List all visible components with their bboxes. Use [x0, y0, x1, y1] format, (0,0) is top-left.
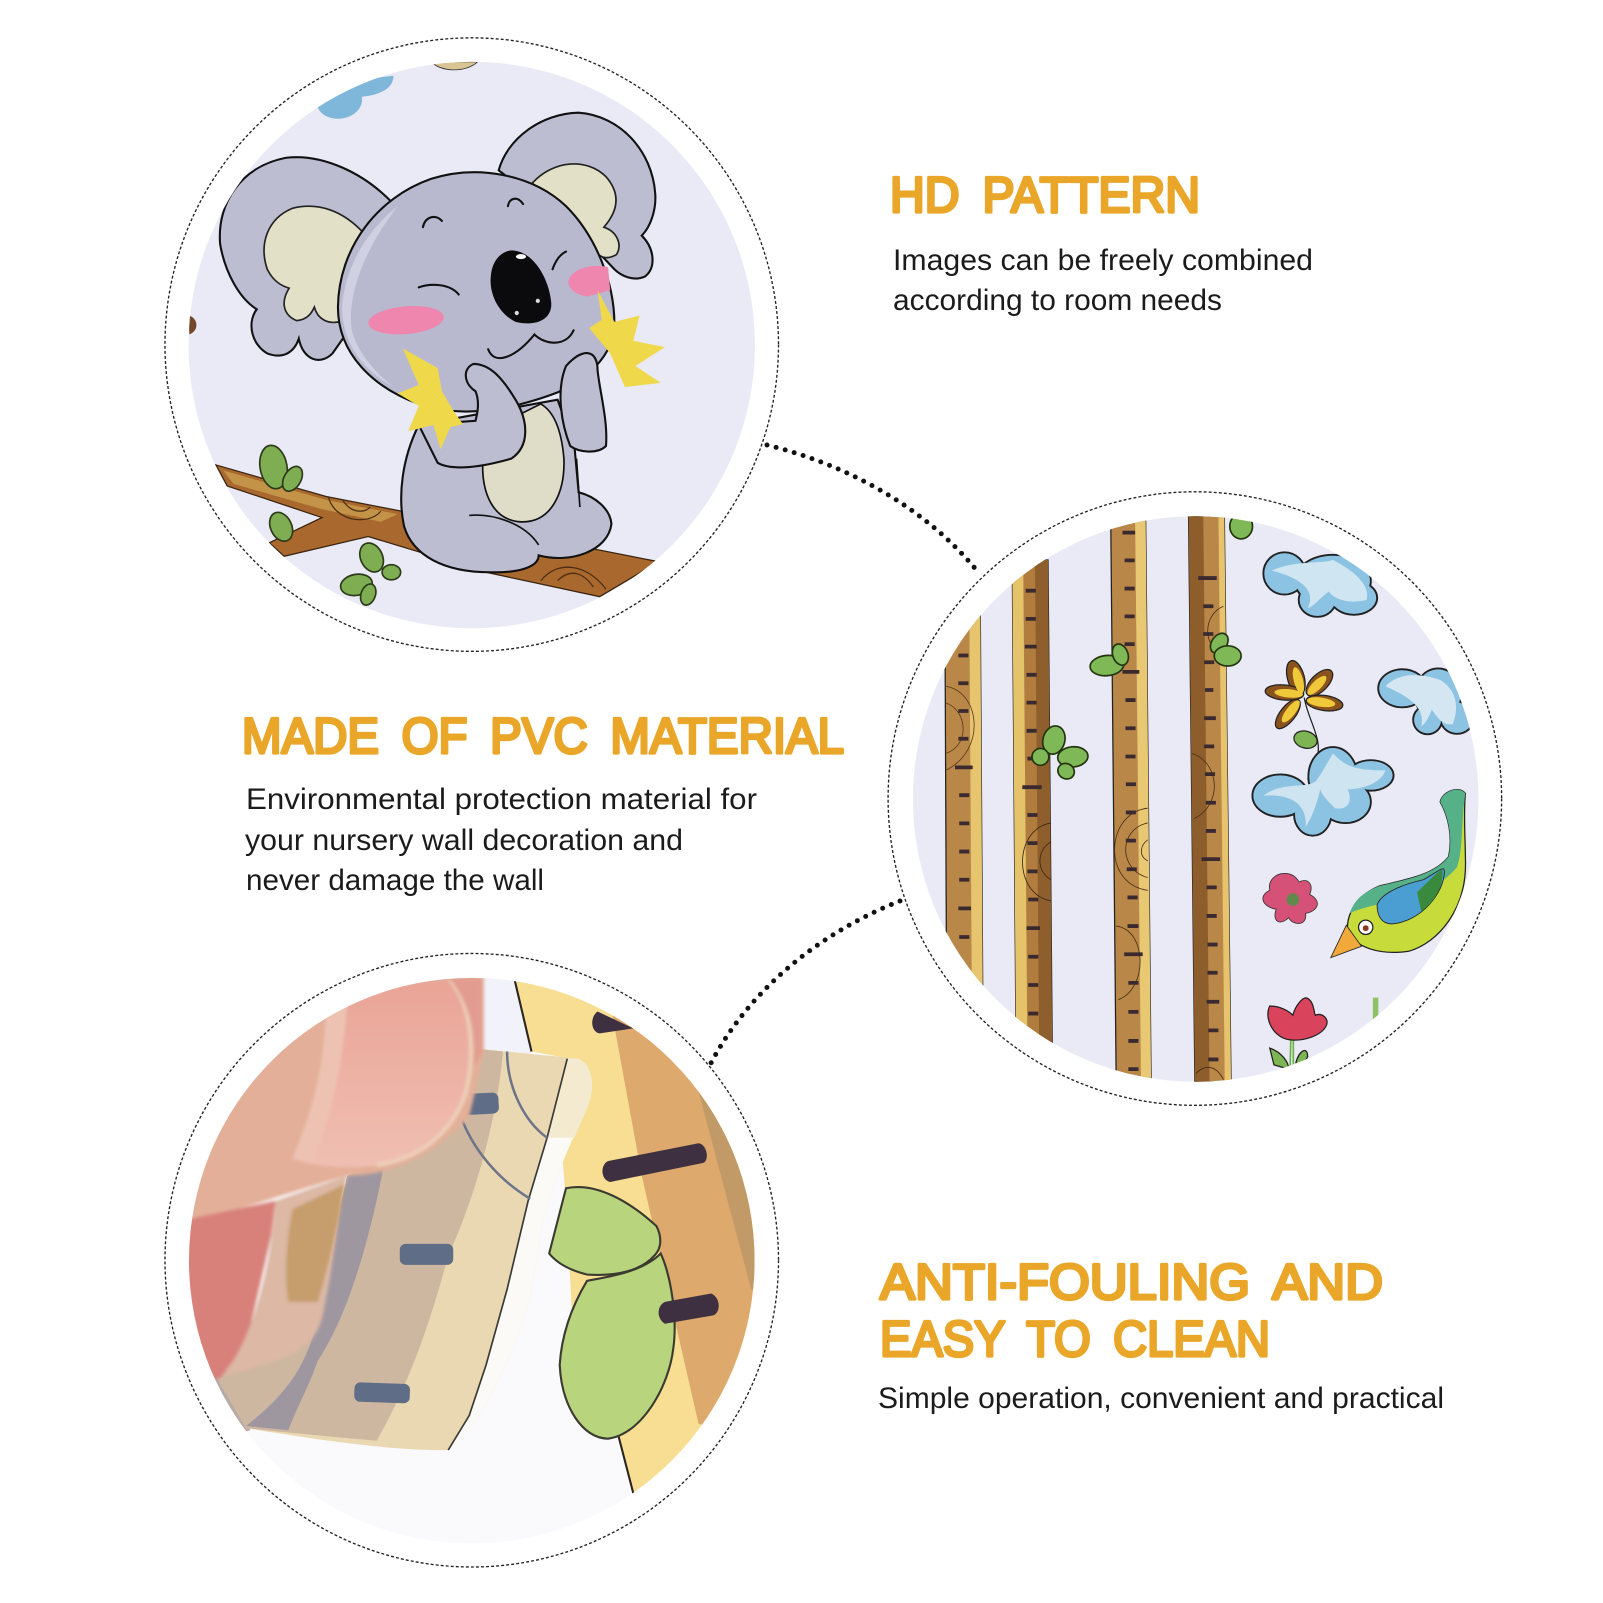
koala body — [401, 400, 611, 572]
trunk 2 — [1012, 560, 1052, 1044]
icon: cloud right — [1378, 669, 1474, 734]
icon: cloud centre — [1253, 747, 1393, 836]
koala head — [338, 172, 614, 412]
koala nose — [491, 250, 551, 323]
branch — [216, 465, 659, 597]
sticker marks — [354, 1092, 499, 1403]
peeled translucent sticker — [183, 1049, 592, 1450]
heading: HD pattern: HD PATTERN — [890, 167, 1200, 223]
wall art: tan band — [612, 1016, 754, 1424]
panel: peeling sticker photo circle — [165, 953, 779, 1567]
icon: cloud top — [1263, 552, 1377, 617]
leaves on trunks — [1032, 514, 1253, 782]
panel: koala circle — [165, 38, 779, 651]
ruler marks — [592, 1012, 707, 1182]
connector: trunks circle to peel circle — [711, 901, 900, 1063]
icon: cloud fragment — [318, 76, 393, 119]
koala arms — [419, 364, 525, 467]
koala belly — [483, 404, 564, 522]
text: PVC description: Environmental protection material for — [246, 783, 757, 816]
icon: koala — [220, 113, 665, 572]
text: PVC description: your nursery wall decoration and — [245, 824, 683, 857]
koala face lines — [419, 199, 574, 358]
icon: tulip — [1268, 998, 1327, 1073]
ruler tick marks — [955, 533, 1220, 1069]
icon: bird — [1331, 790, 1466, 958]
thumb and finger — [175, 974, 484, 1390]
heading: made of PVC material: MADE OF PVC MATERIAL — [242, 708, 844, 764]
koala right ear — [499, 113, 655, 279]
text: PVC description: never damage the wall — [246, 864, 544, 897]
panel: growth chart trunks circle — [888, 492, 1502, 1105]
koala cheeks — [368, 306, 444, 334]
text: HD pattern description: Images can be freely combined — [893, 244, 1313, 277]
trunk 4 — [1189, 516, 1231, 1082]
trunk 3 — [1111, 516, 1151, 1082]
icon: flower and stem — [1265, 659, 1344, 780]
icon: pink flower — [1263, 873, 1317, 923]
text: HD pattern description: according to room needs — [893, 284, 1222, 317]
white wall strip — [482, 978, 530, 1054]
wall art: yellow trunk — [515, 978, 755, 1493]
connector: koala circle to trunks circle — [767, 445, 978, 572]
koala left ear — [220, 157, 393, 360]
text: anti-fouling description: Simple operation, convenient and practical — [878, 1382, 1444, 1415]
trunk 1 — [945, 606, 983, 998]
heading: anti-fouling and easy to clean: ANTI-FOULING AND — [880, 1254, 1383, 1310]
heading: anti-fouling and easy to clean: EASY TO CLEAN — [880, 1311, 1270, 1367]
leaves — [256, 443, 401, 607]
leaf shapes — [549, 1187, 675, 1439]
koala sparkles — [398, 348, 463, 449]
